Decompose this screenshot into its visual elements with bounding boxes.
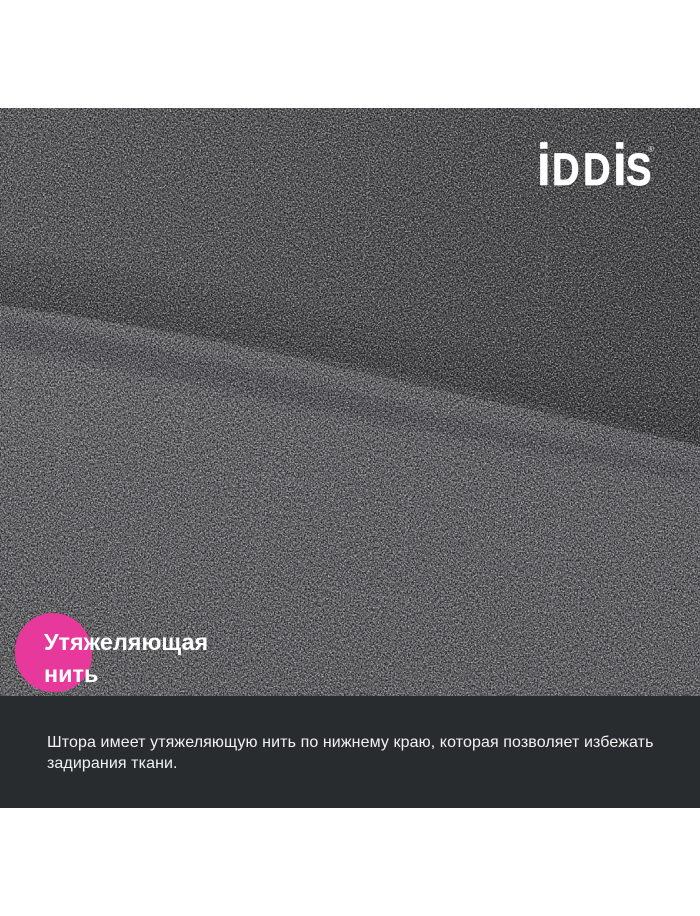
brand logo: S bbox=[626, 144, 652, 195]
description text bbox=[47, 734, 654, 772]
heading: Утяжеляющая bbox=[44, 629, 208, 655]
heading: нить bbox=[44, 661, 98, 687]
loose light threads bbox=[0, 150, 590, 620]
heading bbox=[44, 629, 208, 687]
fold ridge bbox=[0, 318, 700, 482]
description text: задирания ткани. bbox=[47, 754, 178, 772]
brand logo bbox=[537, 135, 654, 195]
upper fabric panel bbox=[0, 108, 700, 458]
fabric photo background bbox=[0, 108, 700, 696]
pink circle accent bbox=[15, 613, 92, 692]
description band bbox=[0, 696, 700, 808]
description text: Штора имеет утяжеляющую нить по нижнему краю, которая позволяет избежать bbox=[47, 734, 654, 751]
brand logo: D bbox=[552, 144, 580, 195]
weave texture bbox=[0, 108, 700, 696]
brand logo: D bbox=[583, 144, 611, 195]
lower fabric panel bbox=[0, 306, 700, 696]
brand logo: ® bbox=[648, 145, 654, 154]
shadow above the fold bbox=[0, 250, 700, 445]
